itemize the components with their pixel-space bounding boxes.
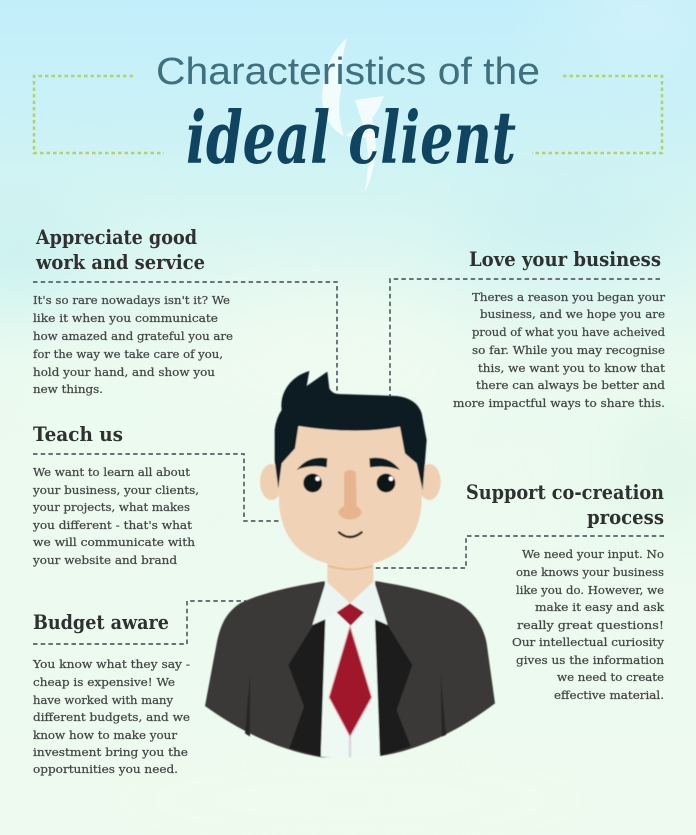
title line 1: Characteristics of the — [156, 51, 540, 93]
text: love body — [453, 290, 666, 410]
text: budget body: investment bring you the — [33, 745, 188, 759]
heading: budget aware: Budget aware — [33, 610, 169, 634]
mouth — [339, 532, 362, 537]
neck — [327, 557, 373, 607]
face — [279, 427, 422, 567]
text: support body — [512, 547, 665, 702]
text: appreciate body: It's so rare nowadays isn't it? We — [33, 293, 230, 307]
heading: support co-creation: process — [587, 505, 664, 529]
text: love body: proud of what you have acheived — [472, 325, 666, 339]
connector: budget — [33, 601, 246, 644]
text: appreciate body: new things. — [33, 382, 103, 396]
text: support body: we need to create — [557, 670, 664, 684]
hair — [275, 371, 427, 490]
eyes — [303, 474, 395, 492]
text: budget body: know how to make your — [33, 728, 178, 742]
heading: appreciate — [35, 225, 205, 274]
heading: teach us: Teach us — [33, 422, 123, 446]
text: appreciate body: how amazed and grateful you are — [33, 329, 233, 343]
text: love body: there can always be better and — [476, 378, 666, 392]
text: support body: Our intellectual curiosity — [512, 635, 665, 649]
panel: teach us — [32, 422, 199, 567]
text: love body: business, and we hope you are — [480, 307, 665, 321]
text: love body: more impactful ways to share this. — [453, 396, 665, 410]
ears — [260, 464, 441, 500]
illustration: businessman — [205, 371, 495, 759]
decorative white swoosh — [322, 38, 384, 192]
eyebrows — [297, 458, 400, 470]
text: support body: gives us the information — [516, 653, 665, 667]
connector: appreciate — [33, 282, 337, 393]
text: appreciate body: hold your hand, and show you — [33, 365, 215, 379]
nose — [338, 470, 362, 519]
necktie — [329, 603, 372, 737]
heading: appreciate: work and service — [35, 250, 205, 274]
connector: support — [373, 536, 664, 568]
shirt collar — [312, 581, 388, 757]
text: love body: so far. While you may recognise — [472, 343, 665, 357]
neck shadow — [328, 566, 373, 569]
panel: support co-creation — [466, 480, 665, 702]
panel: love your business — [453, 247, 666, 410]
title frame right — [532, 76, 662, 153]
text: support body: effective material. — [554, 688, 664, 702]
text: budget body: You know what they say - — [32, 657, 190, 671]
text: budget body — [32, 657, 190, 776]
text: appreciate body: for the way we take care of you, — [33, 347, 223, 361]
heading: support co-creation: Support co-creation — [466, 480, 664, 504]
text: budget body: cheap is expensive! We — [33, 675, 175, 689]
title line 2: ideal client — [186, 95, 516, 180]
text: appreciate body — [33, 293, 233, 396]
text: teach body: your business, your clients, — [32, 483, 199, 497]
text: support body: We need your input. No — [522, 547, 664, 561]
title frame left — [34, 76, 164, 153]
text: budget body: have worked with many — [33, 693, 173, 707]
text: support body: make it easy and ask — [535, 600, 665, 614]
text: teach body: We want to learn all about — [33, 465, 190, 479]
panel: appreciate good work — [33, 225, 233, 396]
text: teach body — [32, 465, 199, 567]
text: budget body: different budgets, and we — [33, 710, 190, 724]
text: love body: this, we want you to know that — [478, 361, 665, 375]
text: support body: like you do. However, we — [516, 583, 664, 597]
text: love body: Theres a reason you began your — [472, 290, 666, 304]
text: teach body: you different - that's what — [32, 518, 192, 532]
connector: teach — [33, 454, 279, 521]
text: support body: really great questions! — [517, 618, 664, 632]
text: budget body: opportunities you need. — [33, 762, 178, 776]
text: support body: one knows your business — [516, 565, 664, 579]
text: teach body: your website and brand — [32, 553, 178, 567]
connector: love — [390, 279, 660, 396]
suit and shirt — [205, 580, 495, 759]
panel: budget aware — [32, 610, 190, 776]
heading: appreciate: Appreciate good — [35, 225, 197, 249]
head — [260, 371, 441, 569]
text: teach body: we will communicate with — [33, 535, 196, 549]
text: teach body: your projects, what makes — [32, 500, 190, 514]
text: appreciate body: like it when you communicate — [33, 311, 218, 325]
heading: love your business: Love your business — [469, 247, 661, 271]
heading: support co-creation — [466, 480, 664, 529]
